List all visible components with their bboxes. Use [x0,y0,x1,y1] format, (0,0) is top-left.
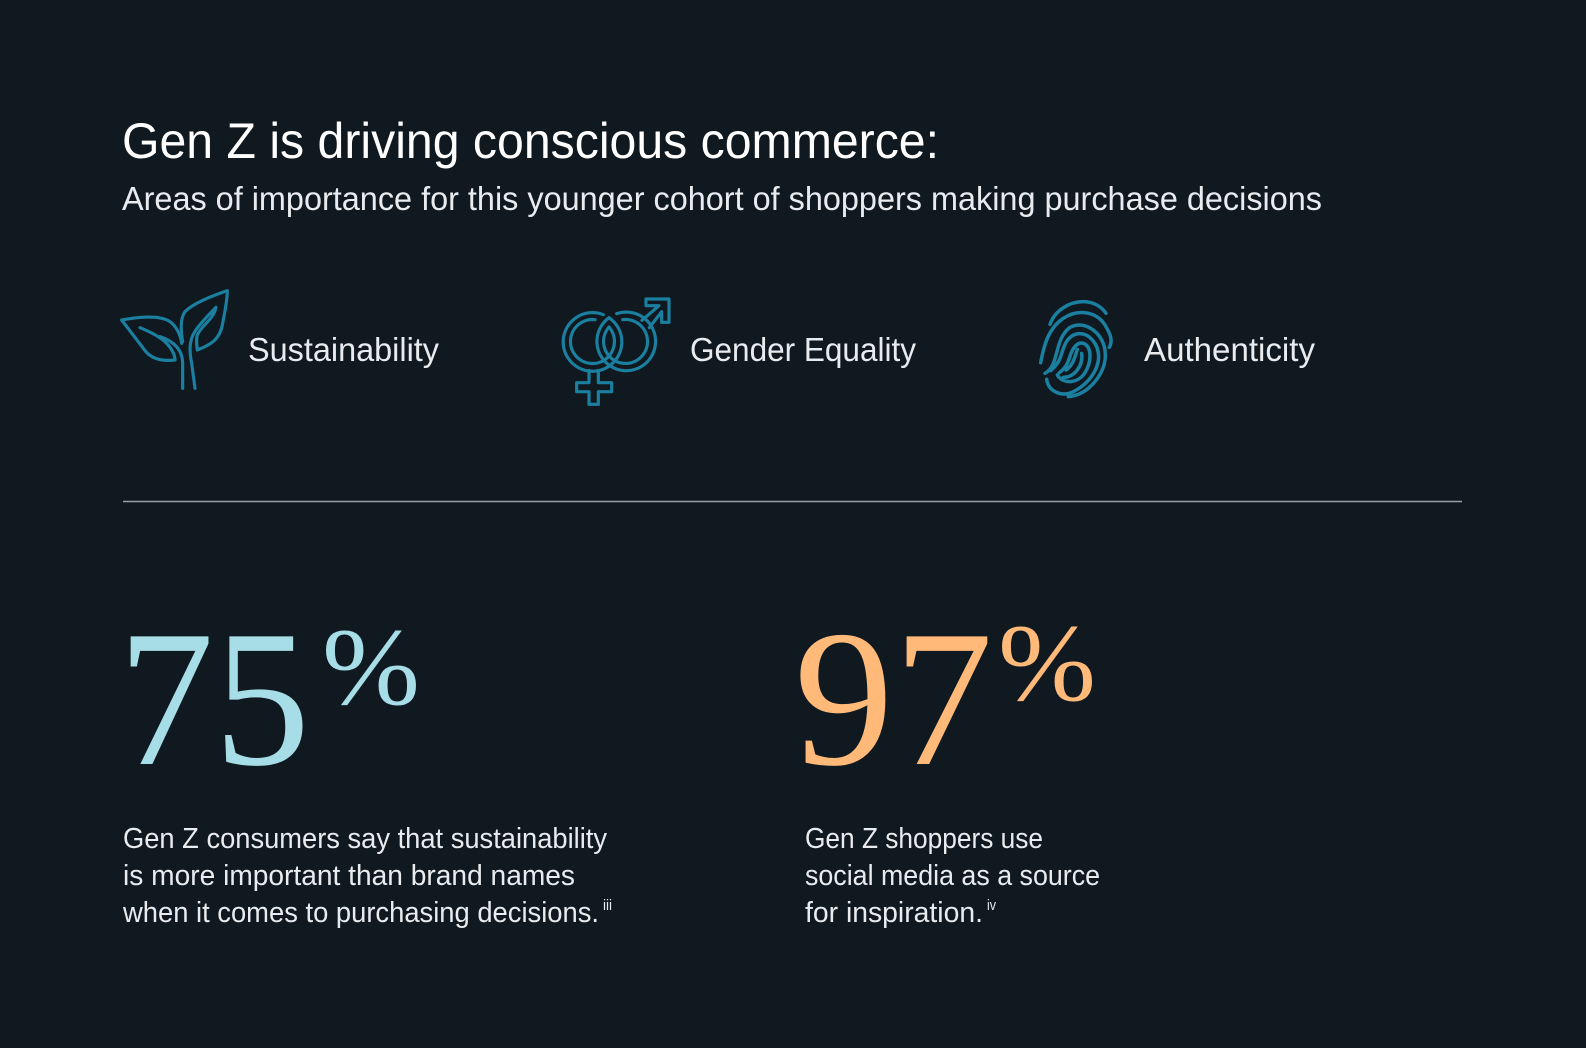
text: sustainability stat [122,823,612,929]
text: social media stat [805,823,1100,929]
text: social media stat: Gen Z shoppers use [805,823,1043,855]
icon: fingerprint [1041,302,1111,397]
item: sustainability [122,291,439,388]
label: gender equality: Gender Equality [690,331,916,368]
label: sustainability: Sustainability [248,331,439,368]
text: sustainability stat: Gen Z consumers say that sustainability [123,823,607,855]
text: sustainability stat: when it comes to purchasing decisions. [122,897,599,929]
label: authenticity: Authenticity [1144,331,1315,368]
percent sign: 75: % [322,606,420,728]
number: 97: 97 [794,591,993,807]
item: authenticity [1041,302,1315,397]
subtitle: Areas of importance for this younger cohort of shoppers making purchase decisions [122,180,1322,217]
text: social media stat: for inspiration. [805,897,983,929]
text: sustainability stat: iii [603,897,612,914]
text: sustainability stat: is more important than brand names [123,860,575,892]
item: gender equality [563,299,916,404]
percent sign: 97: % [998,602,1096,724]
number: 75: 75 [118,591,310,807]
icon: leaf sprout [122,291,227,388]
title: Gen Z is driving conscious commerce: [122,113,939,169]
stat: 97 percent [794,591,1100,929]
text: social media stat: social media as a source [805,860,1100,892]
stat: 75 percent [118,591,612,929]
icon: gender symbols [563,299,669,404]
text: social media stat: iv [987,897,996,914]
